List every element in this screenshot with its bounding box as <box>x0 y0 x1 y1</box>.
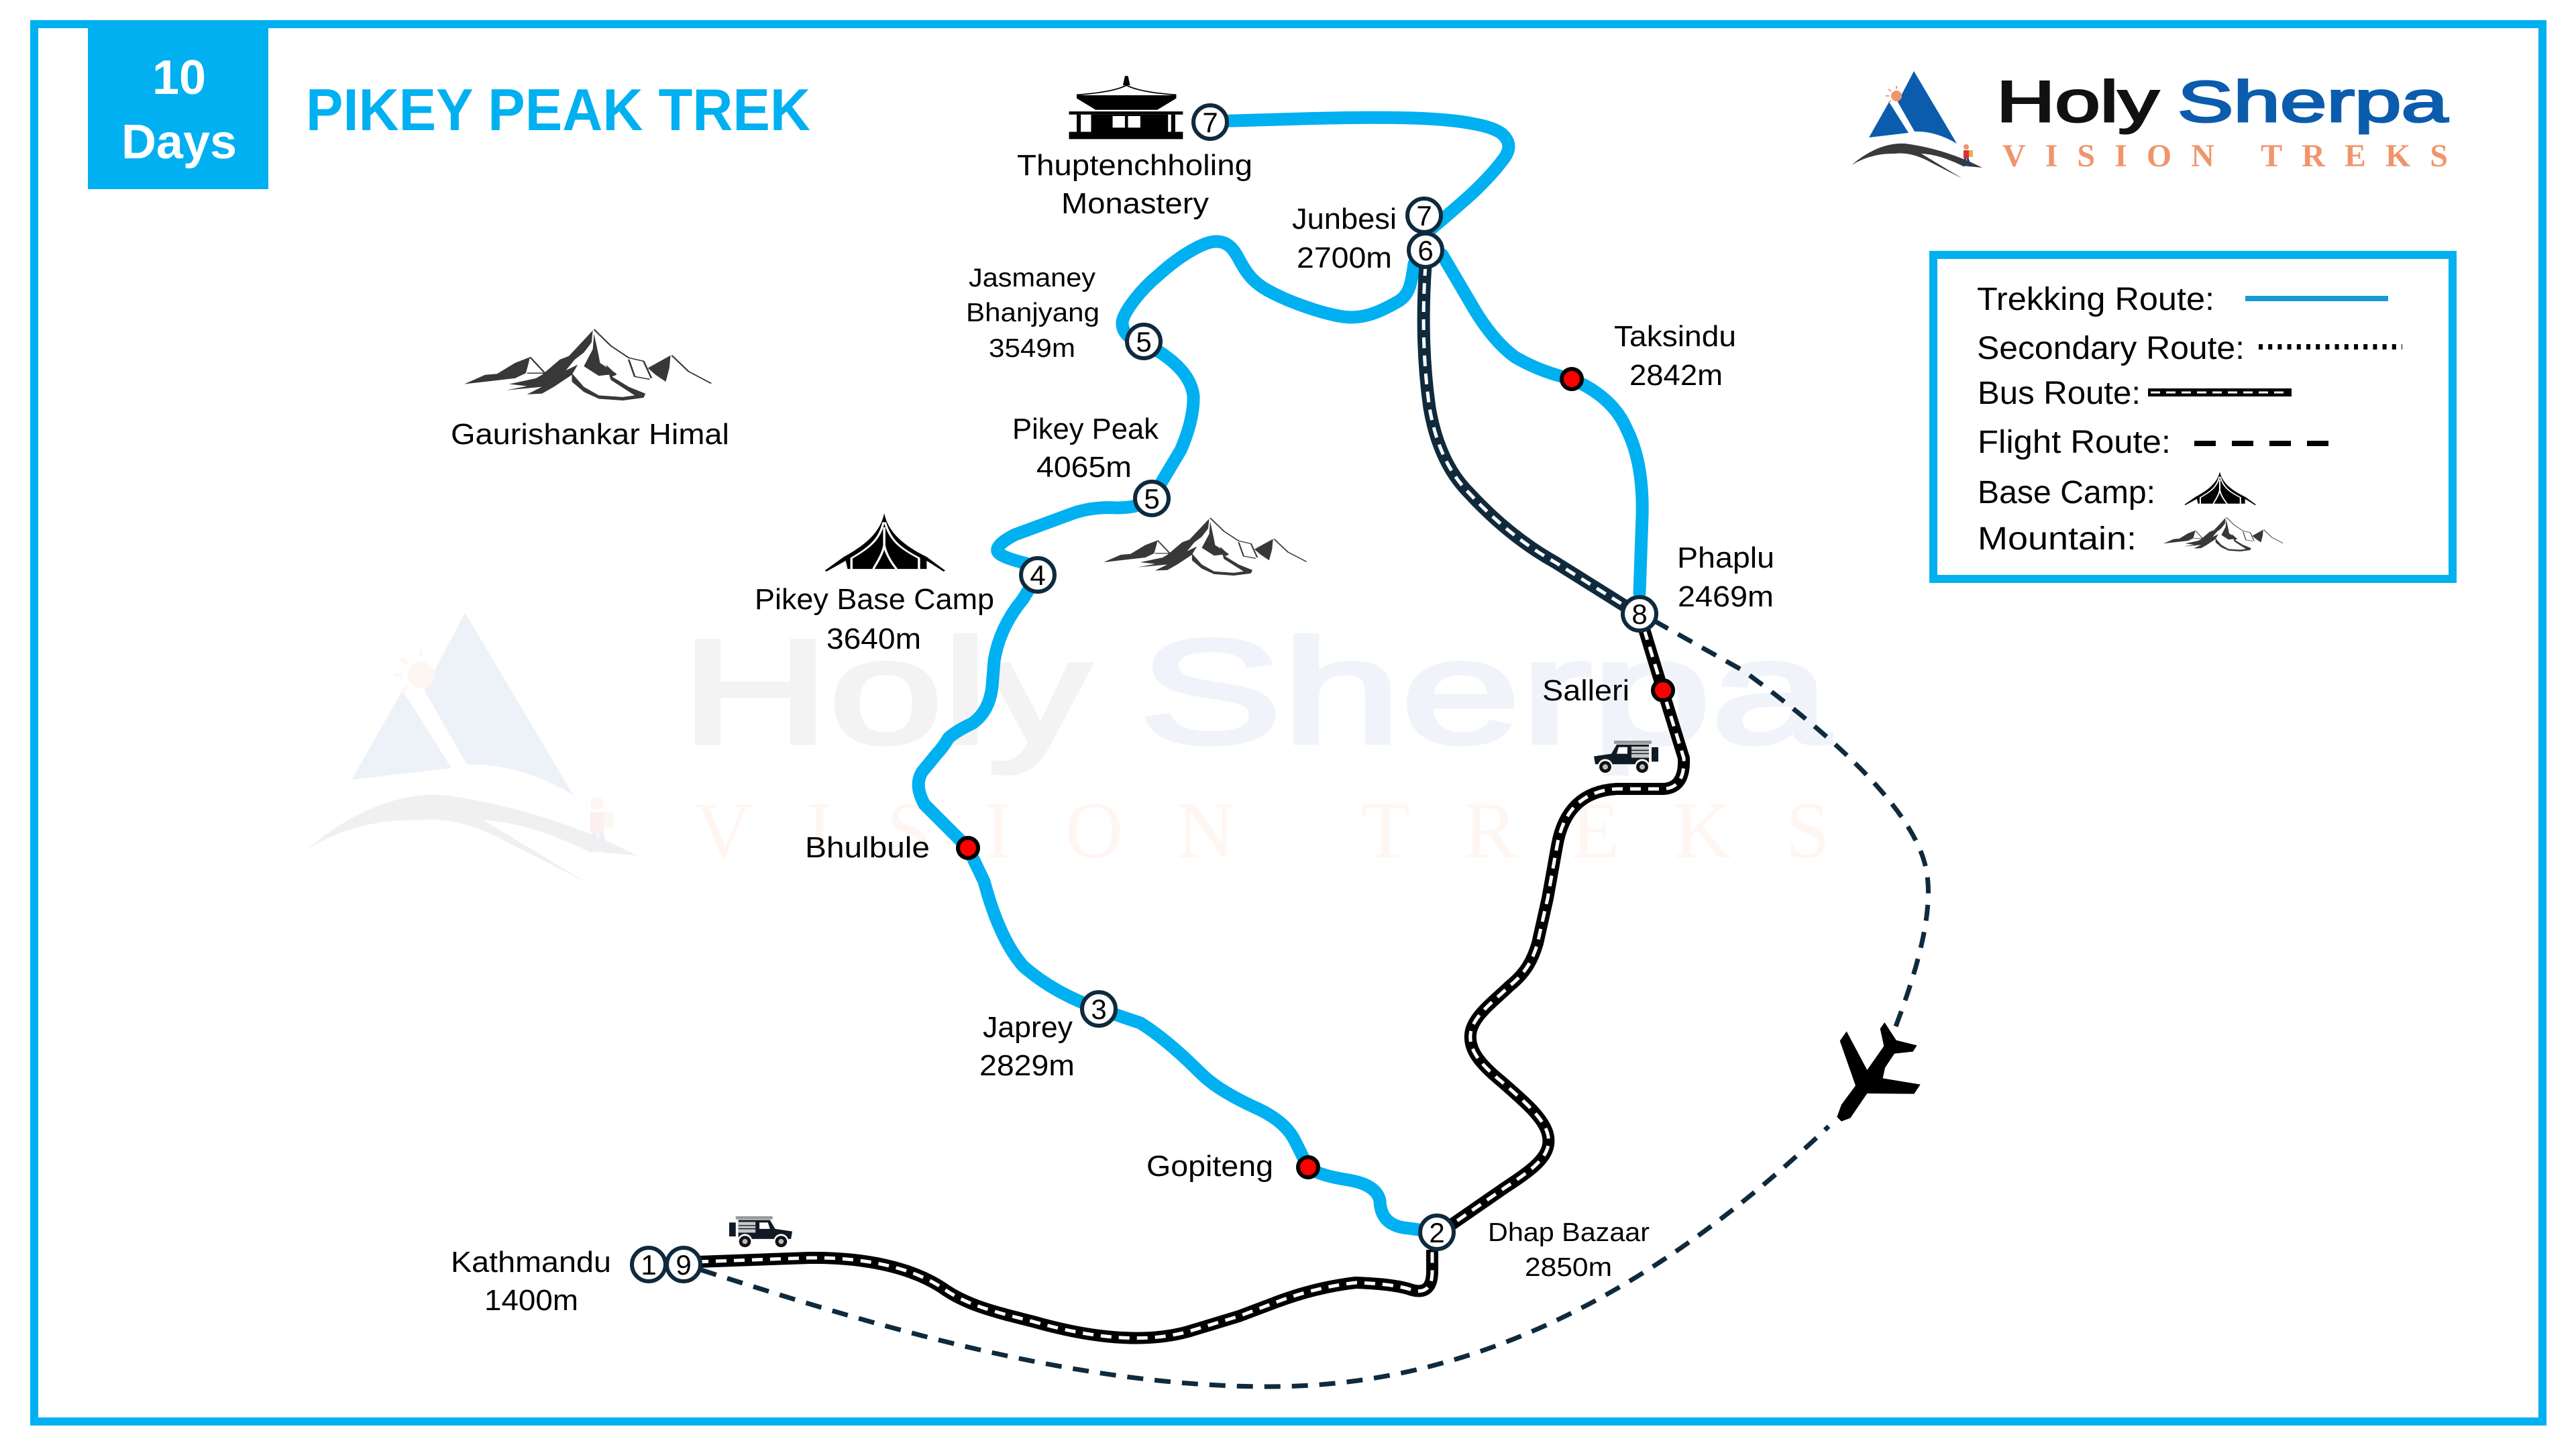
label: Pikey Base Camp: Pikey Base Camp <box>755 583 994 616</box>
legend panel <box>1933 255 2453 579</box>
stop 5: Pikey Peak: 5 <box>1144 483 1160 515</box>
bus route: Dhap Bazaar to Phaplu <box>1442 627 1684 1231</box>
icon: monastery <box>1069 76 1183 139</box>
label: Taksindu <box>1614 320 1736 392</box>
label: Thuptenchholing Monastery: Monastery <box>1061 187 1209 220</box>
label: Gopiteng: Gopiteng <box>1146 1150 1273 1183</box>
legend: bus route <box>1978 376 2292 411</box>
icon: base camp tent <box>825 513 945 572</box>
legend: secondary route: Secondary Route: <box>1977 331 2245 366</box>
icon: airplane <box>1837 1022 1921 1122</box>
icon: jeep near Kathmandu <box>729 1216 792 1248</box>
company logo: Holy <box>1996 70 2159 134</box>
label: Pikey Base Camp <box>755 583 994 655</box>
stop 2: Dhap Bazaar: 2 <box>1429 1217 1445 1248</box>
trekking route <box>918 117 1642 1232</box>
label: Taksindu: Taksindu <box>1614 320 1736 353</box>
label: Dhap Bazaar: Dhap Bazaar <box>1488 1218 1650 1247</box>
stop 5: Pikey Peak <box>1135 482 1169 515</box>
stop 6: Junbesi <box>1409 233 1442 267</box>
red waypoint: Gopiteng <box>1298 1157 1318 1177</box>
label: Thuptenchholing Monastery <box>1017 149 1252 220</box>
legend: bus route: Bus Route: <box>1978 376 2141 411</box>
company logo <box>1851 70 2448 178</box>
label: Junbesi: Junbesi <box>1292 203 1397 235</box>
company logo: Sherpa <box>2178 70 2448 134</box>
icon: mountain near Pikey Peak <box>1104 518 1307 576</box>
label: Bhulbule: Bhulbule <box>805 831 930 864</box>
stop 5: Jasmaney Bhanjyang <box>1127 325 1161 358</box>
label: Jasmaney Bhanjyang: Jasmaney <box>969 264 1096 292</box>
legend: flight route: Flight Route: <box>1978 425 2171 460</box>
stop 8: Phaplu: 8 <box>1631 598 1648 630</box>
label: Kathmandu: Kathmandu <box>451 1246 611 1279</box>
legend: mountain: Mountain: <box>1978 521 2137 557</box>
watermark: Holy Sherpa logo <box>308 609 1831 883</box>
label: Kathmandu <box>451 1246 611 1317</box>
stop 7: Junbesi: 7 <box>1416 200 1432 231</box>
legend: trekking route: Trekking Route: <box>1977 282 2214 317</box>
watermark: Holy Sherpa logo: Holy <box>682 609 1090 774</box>
legend: base camp: Base Camp: <box>1978 475 2155 511</box>
red waypoint: Bhulbule <box>958 838 978 858</box>
label: Gaurishankar Himal: Gaurishankar Himal <box>451 418 729 451</box>
company logo: VISION TREKS <box>2002 138 2448 174</box>
label: Pikey Peak <box>1012 413 1159 484</box>
watermark: Holy Sherpa logo: Sherpa <box>1139 609 1831 774</box>
label: Kathmandu: 1400m <box>484 1284 578 1317</box>
label: Junbesi <box>1292 203 1397 274</box>
label: Japrey: Japrey <box>983 1011 1073 1044</box>
label: Dhap Bazaar <box>1488 1218 1650 1282</box>
bus route: Junbesi to Phaplu <box>1424 265 1627 607</box>
title: PIKEY PEAK TREK <box>306 76 810 143</box>
legend: base camp <box>1978 472 2256 511</box>
label: Thuptenchholing Monastery: Thuptenchholing <box>1017 149 1252 182</box>
red waypoint: Taksindu <box>1562 369 1582 389</box>
stop 6: Junbesi: 6 <box>1417 235 1434 266</box>
stop 9: Kathmandu: 9 <box>676 1249 692 1281</box>
stop 1: Kathmandu <box>632 1248 665 1281</box>
stop 2: Dhap Bazaar <box>1420 1216 1454 1249</box>
stop 8: Phaplu <box>1623 597 1656 631</box>
label: Jasmaney Bhanjyang: 3549m <box>989 334 1075 363</box>
stop 3: Japrey <box>1082 992 1116 1026</box>
label: Jasmaney Bhanjyang <box>966 264 1099 363</box>
label: Japrey <box>979 1011 1075 1082</box>
label: Junbesi: 2700m <box>1297 241 1392 274</box>
stop 3: Japrey: 3 <box>1091 994 1107 1025</box>
stop 7: Thuptenchholing <box>1193 105 1227 139</box>
stop 4: Pikey Base Camp <box>1021 558 1055 592</box>
icon: Gaurishankar mountain <box>464 329 711 400</box>
stop 5: Jasmaney Bhanjyang: 5 <box>1136 326 1152 358</box>
watermark: Holy Sherpa logo: VISION TREKS <box>694 786 1830 875</box>
legend: mountain <box>1978 517 2283 557</box>
icon: jeep near Salleri <box>1594 741 1658 773</box>
red waypoint: Salleri <box>1653 680 1673 700</box>
label: Pikey Peak: 4065m <box>1036 451 1132 484</box>
label: Salleri: Salleri <box>1542 674 1629 707</box>
label: Japrey: 2829m <box>979 1049 1075 1082</box>
stop 1: Kathmandu: 1 <box>641 1249 657 1281</box>
label: Dhap Bazaar: 2850m <box>1525 1253 1612 1282</box>
label: Phaplu <box>1677 541 1774 613</box>
stop 4: Pikey Base Camp: 4 <box>1030 559 1046 591</box>
label: Pikey Base Camp: 3640m <box>826 623 921 655</box>
label: Phaplu: Phaplu <box>1677 541 1774 574</box>
label: Phaplu: 2469m <box>1678 580 1774 613</box>
label: Jasmaney Bhanjyang: Bhanjyang <box>966 299 1099 327</box>
stop 7: Thuptenchholing: 7 <box>1202 107 1218 138</box>
days badge: 10 <box>152 51 206 105</box>
flight route <box>701 621 1928 1387</box>
label: Taksindu: 2842m <box>1629 359 1723 392</box>
days badge: Days <box>121 115 237 169</box>
bus route: Kathmandu to Dhap Bazaar <box>698 1250 1432 1338</box>
label: Pikey Peak: Pikey Peak <box>1012 413 1159 445</box>
legend: trekking route <box>1977 282 2388 317</box>
stop 7: Junbesi <box>1407 199 1441 232</box>
days badge <box>88 28 268 189</box>
stop 9: Kathmandu <box>667 1248 700 1281</box>
